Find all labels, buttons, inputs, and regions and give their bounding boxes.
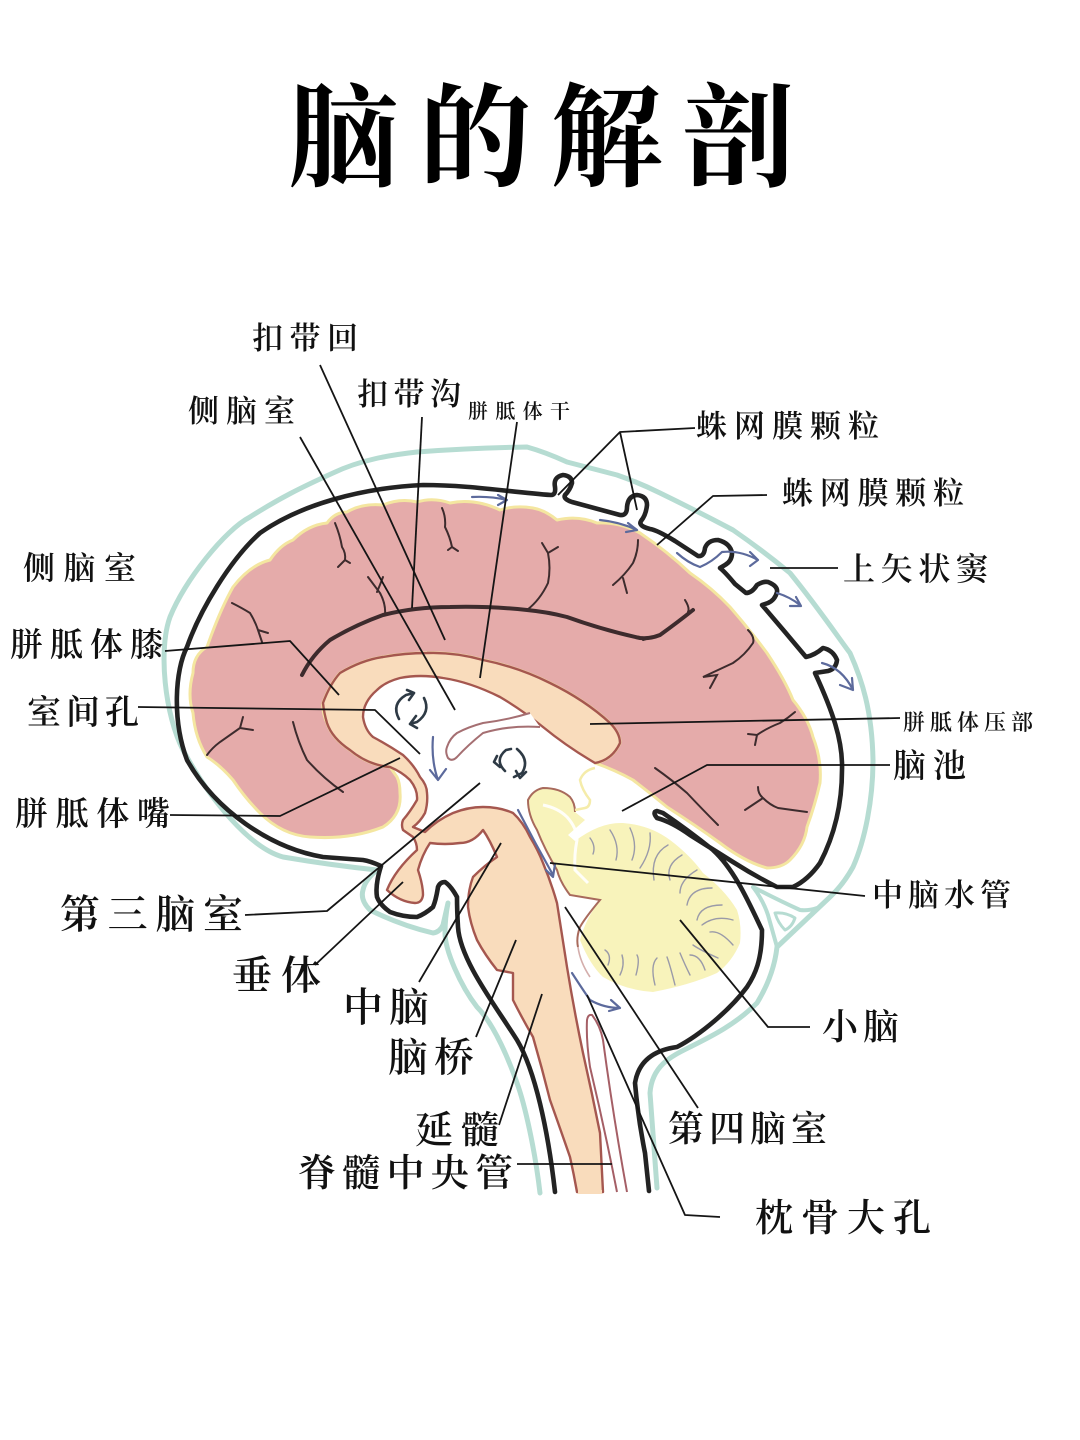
spinal central canal: [587, 1015, 627, 1192]
label: medulla: 延髓: [415, 1110, 499, 1152]
cerebellum: [528, 768, 741, 992]
brain illustration: [164, 447, 873, 1193]
label: midbrain: 中脑: [343, 985, 429, 1030]
label: cingulate gyrus: 扣带回: [252, 321, 358, 356]
label: foramen magnum: 枕骨大孔: [755, 1198, 931, 1240]
leader lines: [138, 365, 900, 1217]
label: central canal: 脊髓中央管: [298, 1153, 513, 1195]
label: cingulate sulcus: 扣带沟: [357, 377, 461, 412]
label: corpus callosum trunk: 胼胝体干: [468, 400, 570, 423]
label: arachnoid granulation two: 蛛网膜颗粒: [782, 476, 964, 511]
labels: [10, 321, 1033, 1240]
label: arachnoid granulation one: 蛛网膜颗粒: [696, 409, 879, 444]
label: lateral ventricle left: 侧脑室: [23, 550, 136, 586]
label: fourth ventricle: 第四脑室: [668, 1109, 827, 1149]
label: lateral ventricle upper: 侧脑室: [188, 394, 295, 429]
dura outline: [177, 475, 842, 1192]
label: cerebral aqueduct: 中脑水管: [872, 878, 1011, 913]
label: splenium: 胼胝体压部: [903, 710, 1033, 735]
label: cistern: 脑池: [893, 748, 966, 785]
label: cerebellum: 小脑: [822, 1007, 899, 1047]
label: hypophysis: 垂体: [232, 953, 321, 998]
label: corpus callosum genu: 胼胝体膝: [10, 627, 164, 664]
septum / fornix strip: [446, 713, 540, 760]
label: rostrum: 胼胝体嘴: [15, 796, 170, 833]
label: third ventricle: 第三脑室: [60, 892, 243, 937]
circular flow icon: third ventricle: [494, 749, 526, 778]
circular flow icon: lateral ventricle: [396, 690, 426, 728]
fourth ventricle lining: [578, 947, 590, 977]
skull outline: mint outer layer: [164, 447, 873, 1193]
label: pons: 脑桥: [388, 1035, 474, 1080]
corpus callosum, fornix, brainstem and hypophysis: [323, 653, 620, 1192]
label: superior sagittal sinus: 上矢状窦: [843, 551, 988, 587]
title: 脑的解剖: [288, 78, 794, 202]
cerebral sulci: [207, 508, 807, 825]
label: interventricular foramen: 室间孔: [27, 694, 139, 732]
cerebrum: [190, 500, 820, 868]
CSF flow arrows: [430, 495, 853, 1011]
